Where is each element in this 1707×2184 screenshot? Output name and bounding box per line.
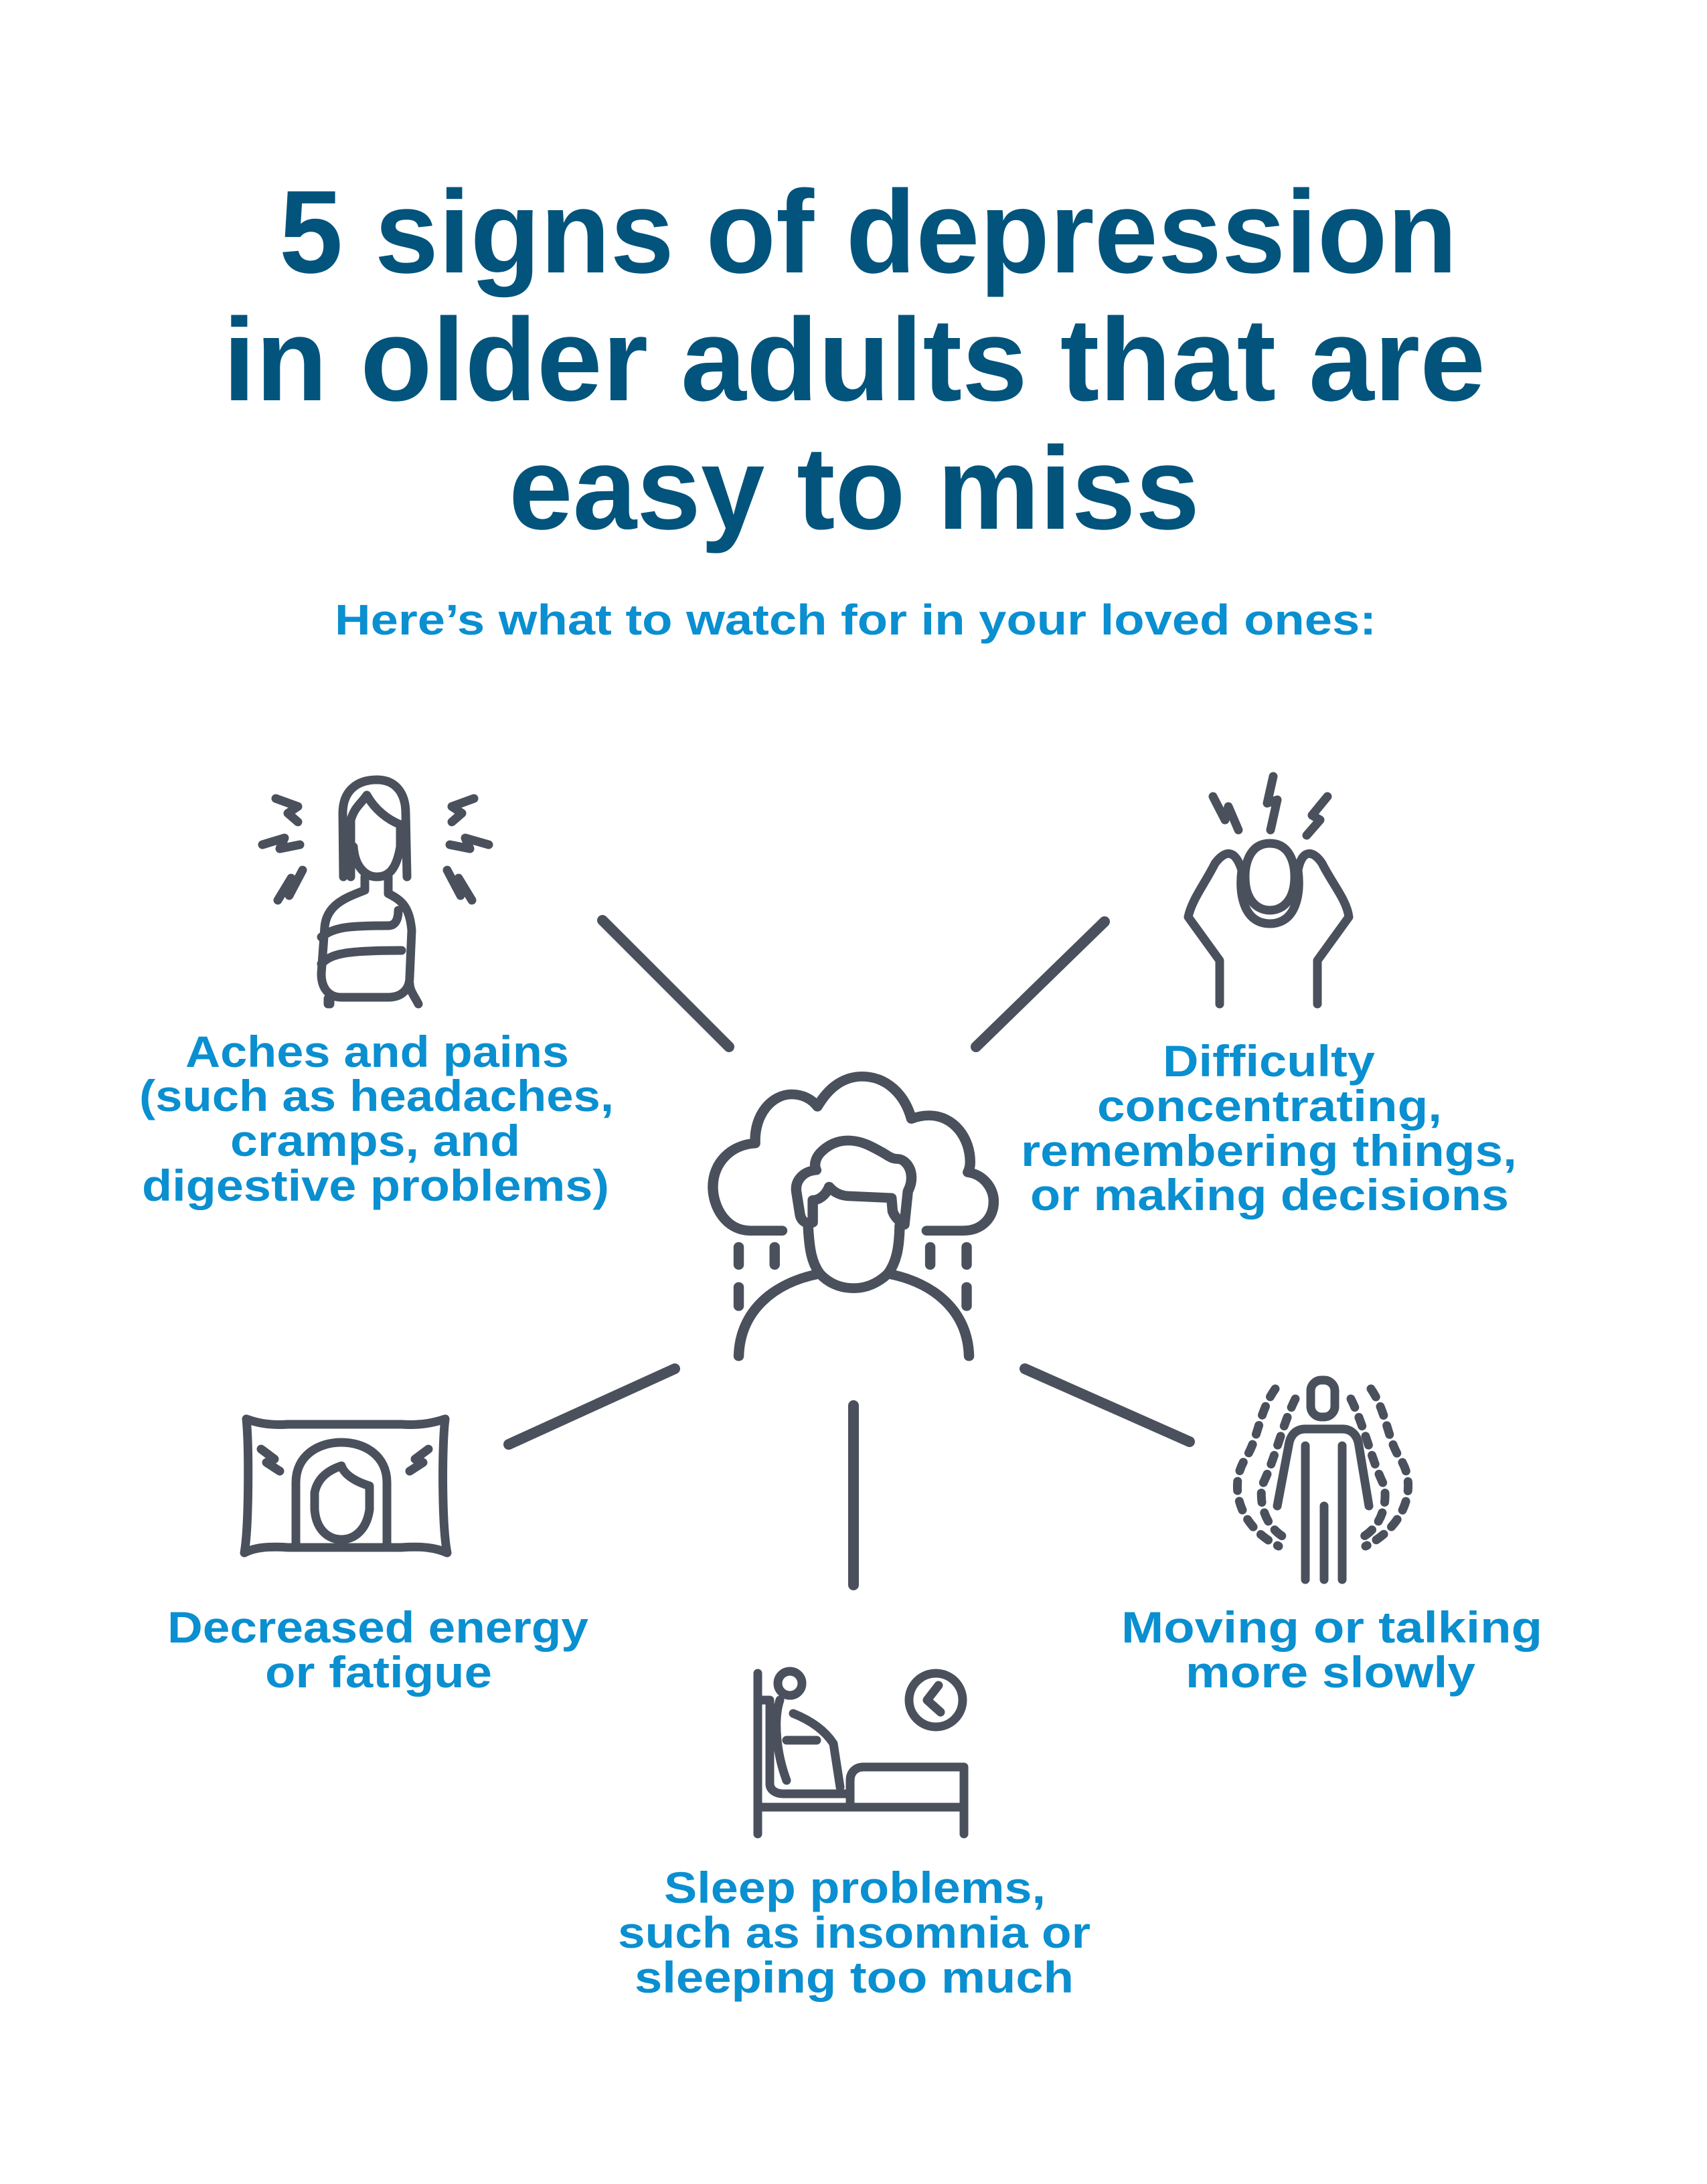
label: aches and pains: [139, 1027, 614, 1210]
title: in older adults that are: [223, 295, 1485, 426]
icon: person moving slowly: [1237, 1380, 1408, 1580]
label: aches and pains: cramps, and: [230, 1116, 520, 1165]
label: sleep problems: sleeping too much: [635, 1952, 1074, 2002]
title: 5 signs of depression: [279, 167, 1457, 298]
spoke lines: [509, 920, 1190, 1585]
label: sleep problems: Sleep problems,: [664, 1863, 1046, 1912]
title: easy to miss: [509, 423, 1200, 554]
icon: person sitting in bed with clock: [758, 1671, 964, 1834]
icon: woman with aches: [262, 780, 489, 1004]
icon: woman on pillow: [244, 1419, 447, 1553]
label: sleep problems: [618, 1863, 1090, 2002]
label: aches and pains: digestive problems): [142, 1161, 609, 1210]
label: difficulty concentrating: [1021, 1036, 1517, 1220]
label: decreased energy: Decreased energy: [167, 1602, 588, 1652]
label: decreased energy: or fatigue: [265, 1647, 492, 1697]
label: decreased energy: [167, 1602, 588, 1697]
label: difficulty concentrating: concentrating,: [1097, 1081, 1442, 1130]
label: sleep problems: such as insomnia or: [618, 1908, 1090, 1957]
subtitle: Here’s what to watch for in your loved ones:: [335, 596, 1376, 644]
label: aches and pains: Aches and pains: [185, 1027, 569, 1076]
label: moving or talking slowly: more slowly: [1186, 1647, 1475, 1697]
icon: central person under rain cloud: [713, 1076, 993, 1356]
label: moving or talking slowly: [1121, 1602, 1542, 1697]
title: [223, 167, 1485, 554]
label: aches and pains: (such as headaches,: [139, 1071, 614, 1120]
label: difficulty concentrating: or making decisions: [1030, 1170, 1509, 1220]
icon: person holding head: [1188, 776, 1349, 1004]
label: moving or talking slowly: Moving or talking: [1121, 1602, 1542, 1652]
label: difficulty concentrating: Difficulty: [1163, 1036, 1375, 1086]
label: difficulty concentrating: remembering things,: [1021, 1126, 1517, 1175]
